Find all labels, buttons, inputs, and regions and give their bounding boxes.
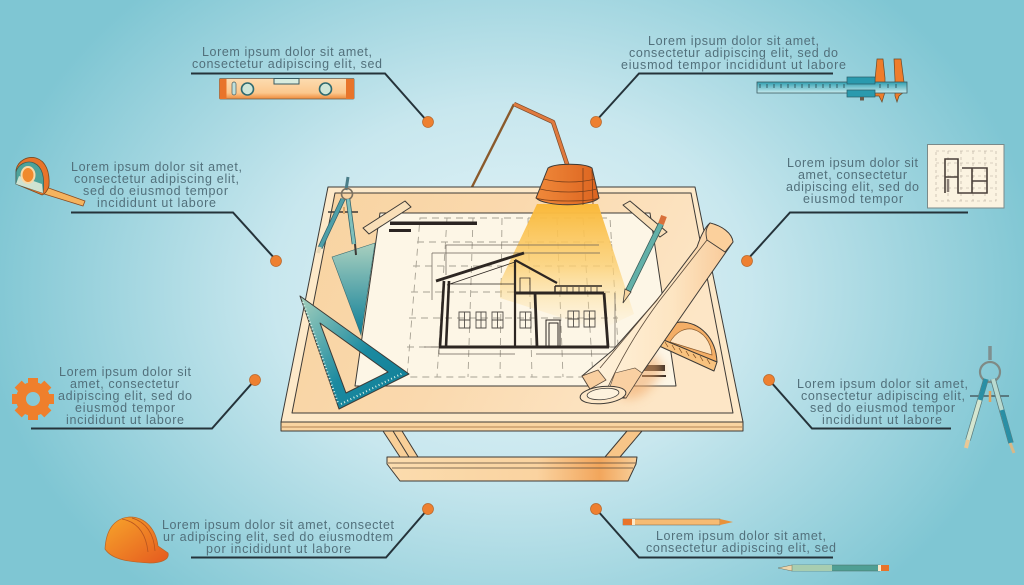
lamp shade bbox=[536, 164, 599, 205]
callout: caliper: eiusmod tempor incididunt ut labore bbox=[621, 58, 846, 72]
table legs bbox=[383, 431, 642, 457]
callout: caliper bbox=[590, 34, 907, 128]
callout: drawing compass: Lorem ipsum dolor sit amet, bbox=[797, 377, 968, 391]
icon: orange pencil bbox=[623, 519, 733, 525]
callout: tape measure: Lorem ipsum dolor sit amet, bbox=[71, 160, 242, 174]
callout: gear: adipiscing elit, sed do bbox=[58, 389, 192, 403]
callout: tape measure: sed do eiusmod tempor bbox=[83, 184, 228, 198]
teal triangle ruler bbox=[332, 243, 375, 335]
callout: helmet: ur adipiscing elit, sed do eiusmodtem bbox=[163, 530, 393, 544]
rolled blueprint bbox=[579, 223, 733, 406]
icon: helmet bbox=[105, 517, 168, 563]
callout: pencils bbox=[590, 504, 889, 571]
callout: drawing compass: incididunt ut labore bbox=[822, 413, 942, 427]
protractor bbox=[657, 322, 717, 371]
callout: gear: eiusmod tempor bbox=[75, 401, 175, 415]
callout: spirit level bbox=[191, 45, 434, 128]
callout: helmet: por incididunt ut labore bbox=[206, 542, 351, 556]
table board bbox=[281, 187, 743, 431]
icon: caliper bbox=[757, 59, 907, 102]
icon: floor plan bbox=[928, 144, 1004, 208]
callout: spirit level: consectetur adipiscing elit, sed bbox=[192, 57, 382, 71]
icon: spirit level bbox=[220, 78, 354, 99]
callout: caliper: consectetur adipiscing elit, sed do bbox=[629, 46, 838, 60]
drafting table bbox=[281, 104, 743, 481]
callout: floor plan: adipiscing elit, sed do bbox=[786, 180, 919, 194]
callout: floor plan: amet, consectetur bbox=[798, 168, 907, 182]
set square bbox=[300, 296, 409, 409]
callout: helmet bbox=[105, 504, 434, 563]
icon: tape measure bbox=[16, 158, 85, 206]
callout: floor plan bbox=[742, 144, 1004, 266]
callout: tape measure: incididunt ut labore bbox=[97, 196, 216, 210]
table foot bar bbox=[387, 457, 637, 481]
callout: tape measure: consectetur adipiscing elit, bbox=[74, 172, 239, 186]
callout: gear bbox=[12, 365, 260, 428]
small compass bbox=[318, 177, 358, 255]
icon: gear bbox=[12, 378, 54, 420]
callout: gear: amet, consectetur bbox=[70, 377, 179, 391]
icon: teal pencil bbox=[778, 565, 889, 571]
lamp light cone bbox=[500, 204, 634, 330]
callout: gear: incididunt ut labore bbox=[66, 413, 184, 427]
callout: drawing compass: consectetur adipiscing elit, bbox=[801, 389, 965, 403]
lamp arm bbox=[472, 104, 568, 187]
house drawing bbox=[424, 245, 620, 354]
pencil on sheet bbox=[623, 216, 664, 303]
callout: tape measure bbox=[16, 158, 282, 266]
callout: helmet: Lorem ipsum dolor sit amet, consectet bbox=[162, 518, 395, 532]
callout: floor plan: eiusmod tempor bbox=[803, 192, 903, 206]
tape strips bbox=[363, 201, 667, 237]
callout: gear: Lorem ipsum dolor sit bbox=[59, 365, 192, 379]
callout: caliper: Lorem ipsum dolor sit amet, bbox=[648, 34, 819, 48]
callout: drawing compass bbox=[764, 346, 1014, 453]
callout: spirit level: Lorem ipsum dolor sit amet, bbox=[202, 45, 372, 59]
title bars bbox=[389, 222, 666, 377]
callout: drawing compass: sed do eiusmod tempor bbox=[810, 401, 955, 415]
callout: floor plan: Lorem ipsum dolor sit bbox=[787, 156, 919, 170]
callout: pencils: Lorem ipsum dolor sit amet, bbox=[656, 529, 826, 543]
callout: pencils: consectetur adipiscing elit, sed bbox=[646, 541, 836, 555]
icon: drawing compass bbox=[966, 346, 1014, 453]
blueprint sheet bbox=[355, 213, 676, 386]
